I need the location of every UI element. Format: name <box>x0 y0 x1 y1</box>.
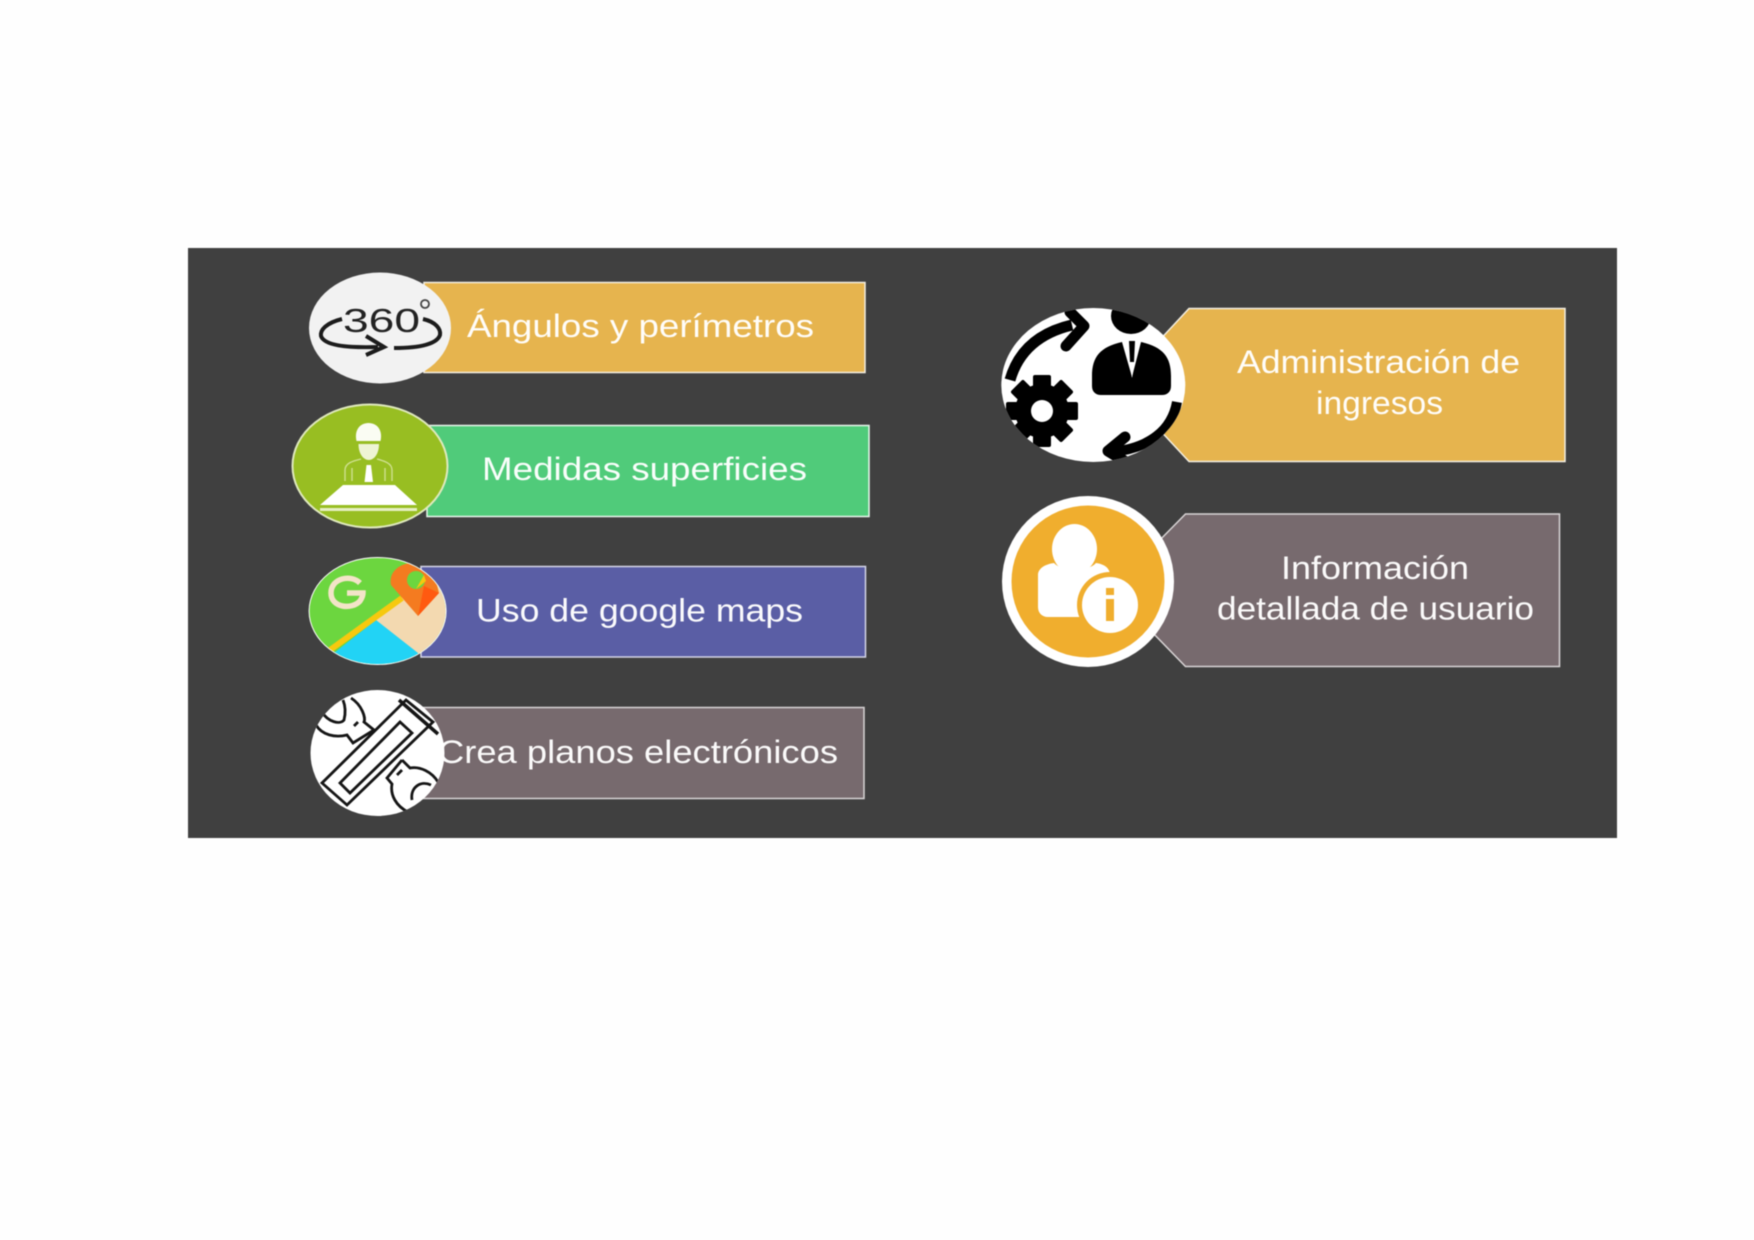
item: Uso de google maps <box>305 555 866 670</box>
dark background panel <box>188 248 1617 838</box>
item: Medidas superficies <box>292 404 869 528</box>
gold label bar <box>424 282 865 372</box>
gold tag shape <box>1155 308 1565 462</box>
icon: engineer at desk <box>292 404 448 528</box>
icon: user information <box>1002 496 1174 667</box>
label text: Información detallada de usuario: Información <box>1281 550 1469 586</box>
item: Información detallada de usuario <box>1002 496 1560 667</box>
label text: Información detallada de usuario: detallada de usuario <box>1217 590 1534 626</box>
blue label bar <box>421 566 866 657</box>
label text: Uso de google maps: Uso de google maps <box>476 592 803 628</box>
item: Ángulos y perímetros <box>309 272 865 384</box>
icon: 360 degrees: 360 <box>343 302 420 339</box>
mauve label bar <box>420 708 864 798</box>
icon: 360 degrees <box>309 272 451 384</box>
item: Administración de ingresos <box>1001 298 1565 462</box>
icon: google maps <box>305 555 450 670</box>
label text: Administración de ingresos: ingresos <box>1316 385 1443 421</box>
item: Crea planos electrónicos <box>310 690 864 816</box>
label text: Administración de ingresos: Administración de <box>1237 344 1520 380</box>
label text: Información detallada de usuario <box>1217 550 1534 626</box>
label text: Administración de ingresos <box>1237 344 1520 421</box>
label text: Medidas superficies: Medidas superficies <box>482 451 807 487</box>
icon: admin cycle with gear and person <box>1001 298 1185 462</box>
green label bar <box>427 426 869 516</box>
label text: Crea planos electrónicos: Crea planos electrónicos <box>438 734 838 770</box>
label text: Ángulos y perímetros: Ángulos y perímetros <box>467 308 814 344</box>
icon: ruler and wrench <box>310 690 444 816</box>
mauve tag shape <box>1150 514 1560 666</box>
